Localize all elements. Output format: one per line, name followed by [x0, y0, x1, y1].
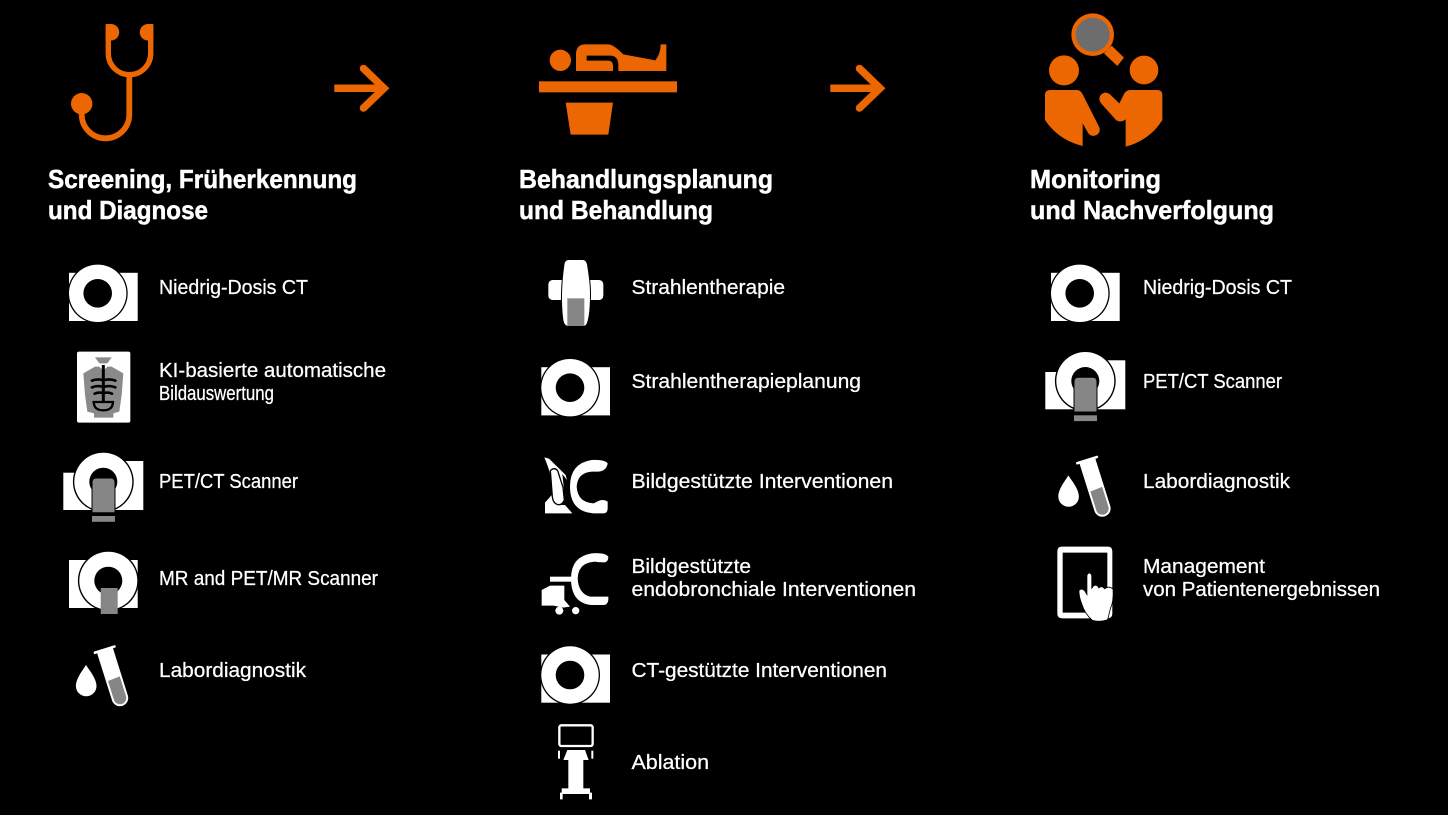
row: Bildgestützte endobronchiale Interventionen	[542, 553, 916, 615]
row: Strahlentherapieplanung	[540, 358, 861, 418]
heading: Screening: und Diagnose	[48, 195, 208, 225]
label: von Patientenergebnissen	[1143, 579, 1380, 601]
icon: radiotherapy system	[548, 260, 603, 326]
label: PET/CT Scanner	[159, 471, 298, 493]
label: KI-basierte automatische	[159, 360, 386, 382]
icon: blood drop and test tube	[1058, 455, 1116, 520]
icon: PET/CT scanner	[63, 451, 143, 522]
row: PET/CT Scanner	[1045, 351, 1282, 421]
label	[632, 556, 916, 601]
heading: Screening: Screening, Früherkennung	[48, 164, 357, 194]
label: Strahlentherapieplanung	[632, 371, 861, 393]
icon: chest x-ray	[77, 352, 130, 423]
row: MR and PET/MR Scanner	[69, 550, 378, 614]
row: KI-basierte automatische Bildauswertung	[77, 352, 386, 423]
row: CT-gestützte Interventionen	[540, 645, 887, 705]
heading: Screening	[48, 164, 357, 225]
heading: Behandlung	[519, 164, 773, 225]
icon: CT scanner	[68, 263, 138, 323]
panel: Behandlungsplanung und Behandlung	[519, 44, 916, 799]
icon: blood drop and test tube	[76, 645, 133, 709]
icon: PET/CT scanner	[1045, 351, 1125, 421]
row: Ablation	[558, 725, 709, 799]
label	[1143, 556, 1380, 601]
label: Niedrig-Dosis CT	[1143, 277, 1292, 299]
arrow: first to second phase	[334, 68, 384, 108]
row: Strahlentherapie	[548, 260, 785, 326]
panel: Monitoring und Nachverfolgung	[1030, 13, 1380, 621]
label: Bildgestützte Interventionen	[632, 471, 893, 493]
row: Labordiagnostik	[76, 645, 307, 709]
panel: Screening, Früherkennung und Diagnose	[48, 24, 386, 709]
row: Bildgestützte Interventionen	[544, 457, 893, 513]
icon: two people and magnifier	[1045, 13, 1162, 147]
icon: CT scanner	[1050, 263, 1120, 323]
icon: tablet with pointing hand	[1057, 547, 1113, 621]
heading: Monitoring: Monitoring	[1030, 164, 1161, 194]
icon: robotic C-arm	[544, 457, 608, 513]
heading: Behandlung: und Behandlung	[519, 195, 713, 225]
label: Bildauswertung	[159, 383, 274, 405]
heading: Monitoring: und Nachverfolgung	[1030, 195, 1274, 225]
icon: stethoscope	[71, 24, 153, 138]
label: Strahlentherapie	[632, 277, 785, 299]
label: Bildgestützte	[632, 556, 751, 578]
label: endobronchiale Interventionen	[632, 579, 916, 601]
label: Labordiagnostik	[159, 660, 307, 682]
row: Niedrig-Dosis CT	[1050, 263, 1292, 323]
label: CT-gestützte Interventionen	[632, 660, 887, 682]
row: PET/CT Scanner	[63, 451, 298, 522]
row: Niedrig-Dosis CT	[68, 263, 308, 323]
heading: Behandlung: Behandlungsplanung	[519, 164, 773, 194]
icon: CT scanner	[540, 358, 610, 418]
icon: MR scanner	[69, 550, 139, 614]
icon: ablation console	[558, 725, 593, 799]
label: Management	[1143, 556, 1265, 578]
row: Labordiagnostik	[1058, 455, 1291, 520]
icon: mobile C-arm	[542, 553, 608, 615]
label: Ablation	[632, 752, 709, 774]
label: PET/CT Scanner	[1143, 371, 1282, 393]
row: Management von Patientenergebnissen	[1057, 547, 1380, 621]
icon: CT scanner	[540, 645, 610, 705]
heading: Monitoring	[1030, 164, 1274, 225]
icon: patient on treatment table	[539, 44, 677, 135]
label: Labordiagnostik	[1143, 471, 1291, 493]
label: Niedrig-Dosis CT	[159, 277, 308, 299]
label: MR and PET/MR Scanner	[159, 568, 378, 590]
label	[159, 360, 386, 405]
arrow: second to third phase	[830, 68, 880, 108]
